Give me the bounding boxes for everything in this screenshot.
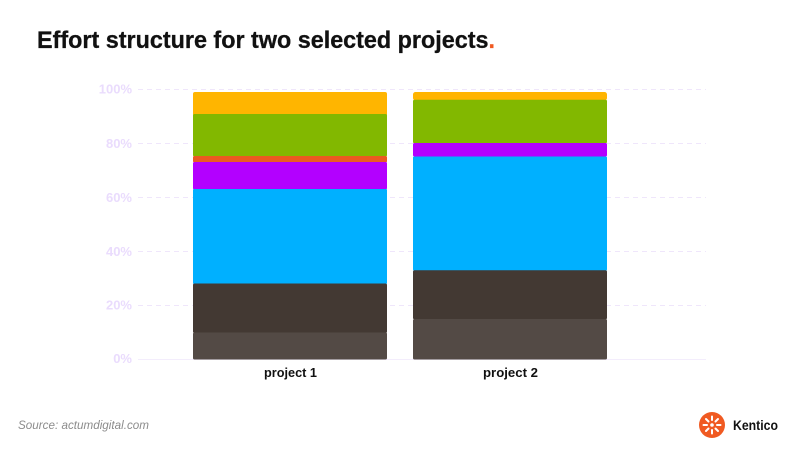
source note: Source: actumdigital.com [18, 418, 149, 432]
y axis labels: 20% [106, 298, 132, 312]
x axis label: project 1: project 1 [264, 365, 317, 380]
y axis labels: 100% [99, 82, 132, 96]
y axis labels: 40% [106, 244, 132, 259]
stacked bar: project 1 [193, 92, 387, 360]
stacked bar: project 2 [413, 92, 607, 360]
y axis labels: 60% [106, 190, 132, 205]
title: Effort structure for two selected projects. [37, 27, 495, 54]
brand name: Kentico [733, 418, 778, 433]
x axis label: project 2: project 2 [483, 365, 538, 380]
y axis labels: 80% [106, 136, 132, 151]
y axis labels: 0% [113, 351, 132, 366]
icon: Kentico logo [699, 412, 725, 438]
y axis labels [99, 82, 132, 366]
